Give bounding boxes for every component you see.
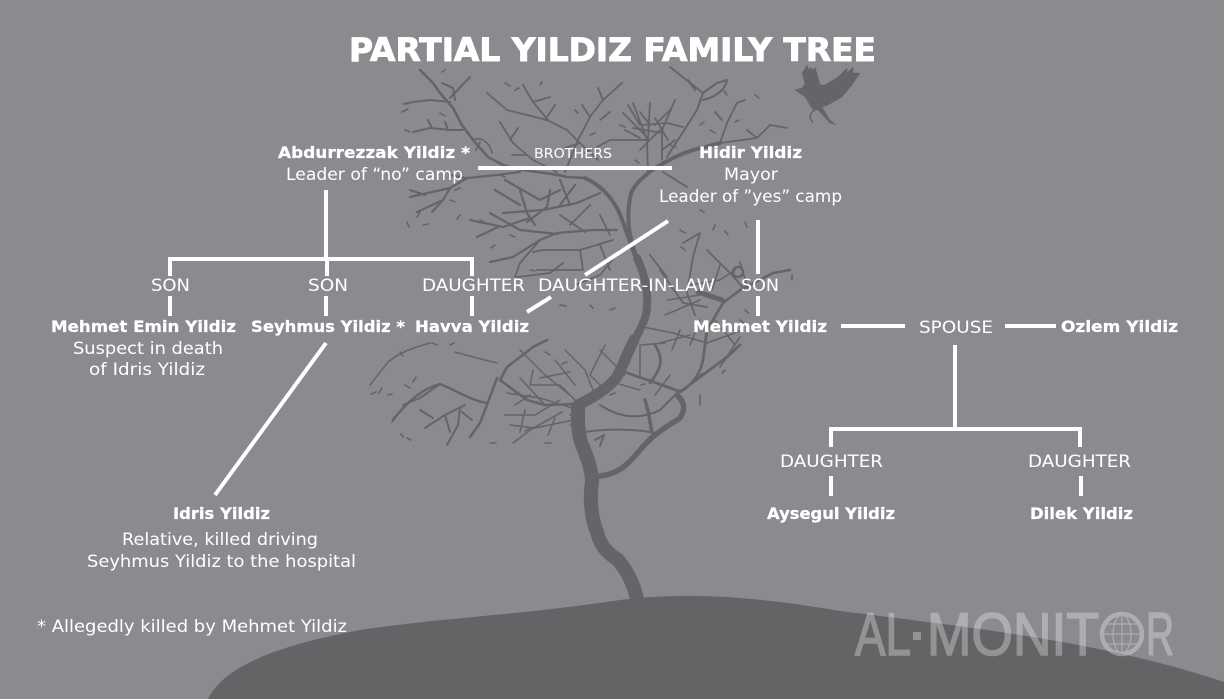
person: Havva Yildiz: Havva Yildiz [415, 317, 529, 336]
person: Ozlem Yildiz: Ozlem Yildiz [1061, 317, 1178, 336]
middle dense branches [470, 180, 620, 285]
person: Dilek Yildiz: Dilek Yildiz [1030, 504, 1133, 523]
person: Mehmet Emin Yildiz: of Idris Yildiz [89, 360, 205, 379]
tree leaves [371, 70, 792, 443]
person: Idris Yildiz: Seyhmus Yildiz to the hospital [87, 552, 356, 571]
icon: globe [1102, 614, 1142, 654]
top cluster and right branches [597, 67, 787, 187]
lower tree branches [370, 330, 740, 446]
label: brothers: BROTHERS [534, 147, 612, 162]
relationship labels: SON [151, 276, 190, 295]
lower right limb [600, 396, 684, 476]
right lobe branches [643, 233, 790, 367]
icon: bird in flight [795, 65, 860, 125]
person: Idris Yildiz: Relative, killed driving [122, 530, 318, 549]
upper trunk [578, 340, 634, 405]
relationship labels: SON [308, 276, 348, 295]
title: PARTIAL YILDIZ FAMILY TREE [349, 31, 876, 69]
relationship labels: DAUGHTER [422, 276, 525, 295]
person: Mehmet Emin Yildiz: Mehmet Emin Yildiz [51, 317, 236, 336]
person: Abdurrezzak Yildiz: Leader of “no” camp [286, 165, 463, 184]
top centre branches [487, 83, 622, 172]
relationship labels: SPOUSE [919, 318, 993, 337]
tree trunk [578, 407, 637, 599]
person: Idris Yildiz: Idris Yildiz [173, 504, 270, 523]
person: Hidir Yildiz: Mayor [724, 165, 778, 184]
person: Seyhmus Yildiz: Seyhmus Yildiz * [251, 317, 406, 336]
footnote: * Allegedly killed by Mehmet Yildiz [37, 617, 347, 636]
logo: AL-Monitor: MONIT [927, 601, 1099, 668]
person: Idris Yildiz [87, 504, 356, 571]
person: Mehmet Emin Yildiz [51, 317, 236, 379]
person: Abdurrezzak Yildiz: Abdurrezzak Yildiz * [278, 143, 471, 162]
relationship labels: DAUGHTER [1028, 452, 1131, 471]
logo: AL-Monitor: R [1146, 601, 1174, 668]
connector lines [170, 168, 1081, 496]
hill [208, 596, 1224, 699]
logo: AL-Monitor [855, 601, 1174, 668]
person: Hidir Yildiz: Hidir Yildiz [699, 143, 802, 162]
relationship labels: DAUGHTER [780, 452, 883, 471]
person: Mehmet Emin Yildiz: Suspect in death [73, 339, 223, 358]
person: Hidir Yildiz [659, 143, 842, 206]
person: Aysegul Yildiz: Aysegul Yildiz [767, 504, 895, 523]
relationship labels: DAUGHTER-IN-LAW [538, 276, 715, 295]
person: Hidir Yildiz: Leader of ”yes” camp [659, 187, 842, 206]
upper right limb [628, 143, 720, 258]
tree illustration [370, 67, 792, 599]
top-left lobe branches [404, 70, 585, 212]
logo: AL-Monitor: AL [855, 601, 911, 668]
person: Abdurrezzak Yildiz [278, 143, 471, 184]
relationship labels [151, 276, 1131, 471]
person: Mehmet Yildiz: Mehmet Yildiz [693, 317, 827, 336]
relationship labels: SON [741, 276, 779, 295]
